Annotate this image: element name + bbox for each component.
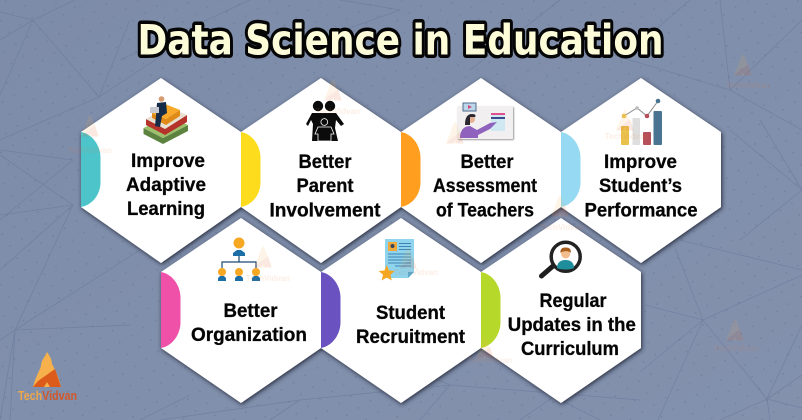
panel: Better Assessment of Teachers xyxy=(401,103,538,222)
faint watermarks xyxy=(68,54,770,365)
panel: Regular Updates in the Curriculum xyxy=(481,242,636,360)
label xyxy=(191,301,307,346)
label: Learning xyxy=(127,199,205,220)
label: Regular xyxy=(540,291,607,312)
accent tab: lime xyxy=(481,272,500,348)
logo: TechVidvan: TechVidvan xyxy=(18,389,77,403)
faint watermarks: TechVidvan xyxy=(68,146,112,155)
accent tab: light blue xyxy=(561,132,580,207)
title: Data Science in Education xyxy=(138,16,664,64)
icon: magnifier with person xyxy=(542,242,580,276)
icon: resume with star xyxy=(379,239,414,280)
panel: Student Recruitment xyxy=(321,239,466,348)
label: Improve xyxy=(131,151,205,172)
faint watermarks: TechVidvan xyxy=(468,356,512,365)
label: of Teachers xyxy=(436,200,534,222)
icon: teacher at board xyxy=(457,103,513,139)
icon: bar and line chart xyxy=(621,99,662,145)
logo: TechVidvan xyxy=(18,352,77,403)
label xyxy=(126,151,206,220)
label: Curriculum xyxy=(521,339,619,360)
faint watermarks: TechVidvan xyxy=(394,268,438,277)
label: Adaptive xyxy=(126,175,206,196)
label xyxy=(356,303,466,348)
accent tab: yellow xyxy=(241,132,260,207)
label: Organization xyxy=(191,325,307,346)
icon: org chart xyxy=(218,238,260,281)
faint watermarks: TechVidvan xyxy=(540,223,584,232)
icon: family xyxy=(306,101,344,141)
label: Recruitment xyxy=(356,327,466,348)
label: Involvement xyxy=(270,200,381,222)
label: Student’s xyxy=(599,176,682,197)
label: Parent xyxy=(296,176,354,197)
label: Updates in the xyxy=(508,315,636,336)
faint watermarks: TechVidvan xyxy=(714,344,758,353)
faint watermarks: TechVidvan xyxy=(605,132,649,141)
label: Student xyxy=(376,303,446,324)
label xyxy=(508,291,636,360)
label: Assessment xyxy=(433,176,538,197)
label xyxy=(270,152,381,222)
panel: Better Parent Involvement xyxy=(241,101,381,222)
label: Improve xyxy=(604,152,677,173)
accent tab: teal xyxy=(81,132,100,207)
panel: Improve Student's Performance xyxy=(561,99,698,222)
label: Better xyxy=(224,301,278,322)
accent tab: pink xyxy=(161,272,180,348)
faint watermarks: TechVidvan xyxy=(316,107,360,116)
label: Better xyxy=(298,152,352,173)
label: Performance xyxy=(584,200,698,222)
faint watermarks: TechVidvan xyxy=(246,274,290,283)
accent tab: orange xyxy=(401,132,420,207)
label xyxy=(433,152,538,222)
label: Better xyxy=(460,152,514,173)
label xyxy=(584,152,698,222)
panel: Better Organization xyxy=(161,238,307,348)
icon: person on books xyxy=(144,96,188,144)
hexagon backgrounds xyxy=(81,78,721,403)
accent tab: purple xyxy=(321,272,340,348)
faint watermarks: TechVidvan xyxy=(726,81,770,90)
panel: Improve Adaptive Learning xyxy=(81,96,206,220)
